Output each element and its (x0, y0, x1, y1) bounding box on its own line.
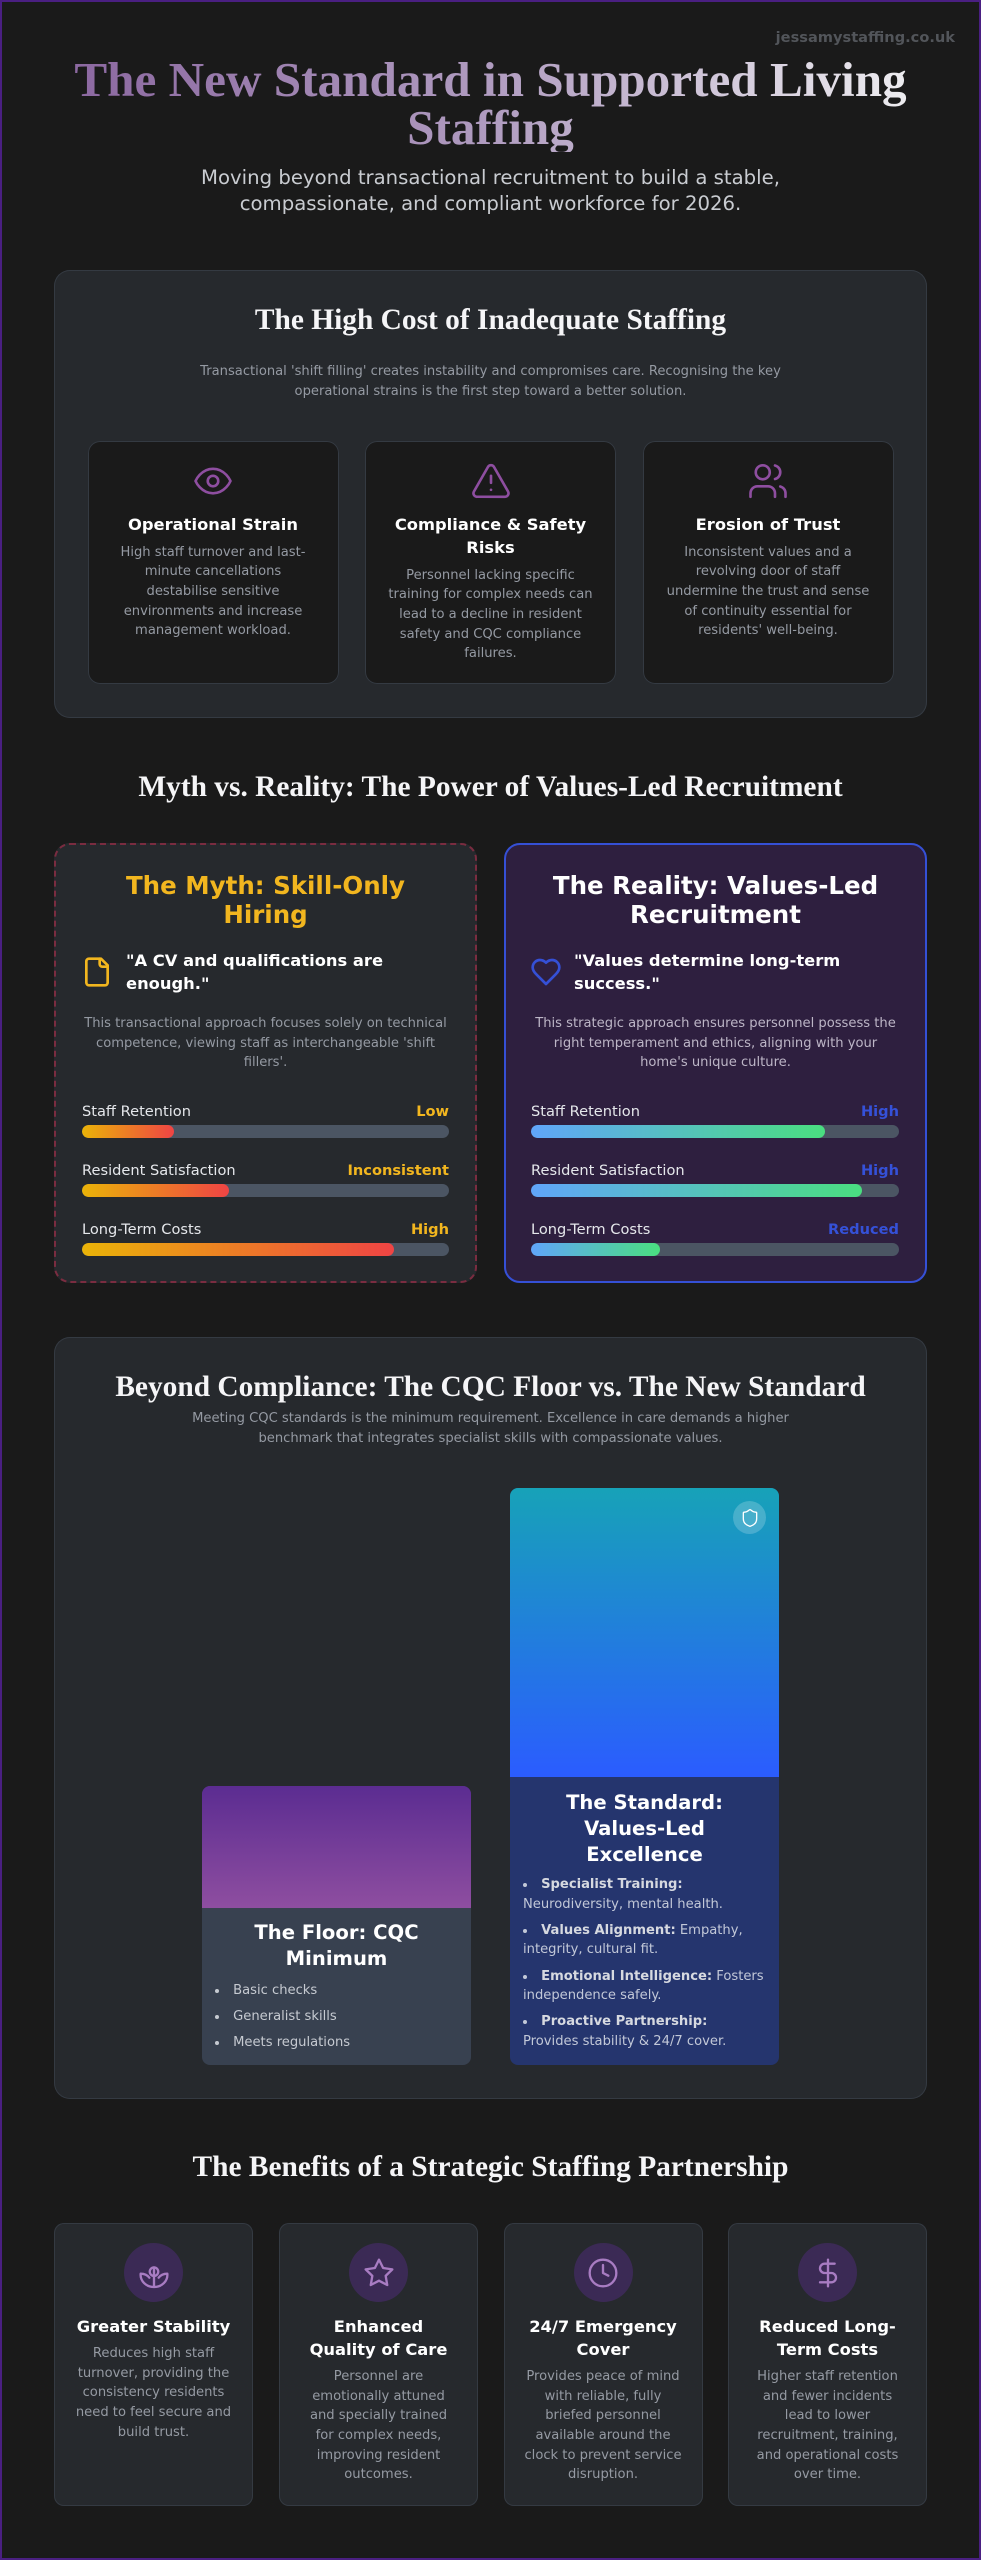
benefit title: Enhanced (334, 2317, 423, 2336)
icon badge: dollar (798, 2243, 857, 2302)
icon badge: clock (574, 2243, 632, 2302)
heading: benefits: The Benefits of a Strategic Staffing Partnership (193, 2151, 788, 2183)
floor list: Basic checks (233, 1983, 317, 1998)
benefit text: clock to prevent service (524, 2448, 682, 2463)
myth heading: Hiring (223, 900, 308, 929)
bar: staff retention: Staff Retention (82, 1102, 191, 1120)
benefit text: build trust. (118, 2425, 189, 2440)
benefit title (759, 2317, 896, 2359)
benefit text (310, 2369, 447, 2482)
website label: jessamystaffing.co.uk (776, 29, 955, 46)
myth text: fillers'. (244, 1055, 287, 1070)
bar: resident satisfaction: Resident Satisfaction (531, 1162, 685, 1178)
subtitle: compassionate, and compliant workforce for 2026. (240, 192, 741, 215)
bar: long-term costs: High (411, 1220, 449, 1238)
panel: high cost of inadequate staffing (54, 270, 927, 718)
reality heading: Recruitment (630, 900, 801, 929)
badge: shield (733, 1501, 766, 1534)
card text: safety and CQC compliance (400, 627, 581, 642)
card: operational strain (88, 441, 338, 684)
text: high cost intro (200, 364, 781, 399)
icon badge: star (349, 2243, 408, 2302)
standard list: Emotional Intelligence: Fosters (541, 1969, 764, 1984)
column: the floor (202, 1786, 471, 2065)
benefit text (76, 2346, 231, 2440)
bar: staff retention: Low (416, 1102, 449, 1120)
title: Staffing (407, 100, 574, 155)
standard list: Values Alignment: Empathy, (541, 1923, 743, 1938)
icon: eye (194, 468, 232, 495)
bar: long-term costs (531, 1220, 899, 1256)
bar: resident satisfaction (531, 1162, 899, 1197)
myth text: This transactional approach focuses solely on technical (84, 1016, 447, 1031)
benefit text: need to feel secure and (76, 2405, 231, 2420)
standard title: Excellence (586, 1843, 703, 1866)
text: high cost intro: operational strains is the first step toward a better solution. (295, 384, 686, 399)
standard list: Proactive Partnership: (541, 2014, 707, 2029)
card: reduced long-term costs (728, 2223, 927, 2506)
benefit title: 24/7 Emergency (529, 2317, 677, 2336)
card: compliance and safety risks (365, 441, 616, 684)
standard list: integrity, cultural fit. (523, 1942, 658, 1957)
benefit text: with reliable, fully (545, 2389, 661, 2404)
bar: long-term costs: Long-Term Costs (531, 1220, 650, 1238)
panel: beyond compliance (54, 1337, 927, 2099)
card text: training for complex needs can (388, 587, 593, 602)
bar: resident satisfaction: High (861, 1162, 899, 1178)
card text: Inconsistent values and a (684, 544, 852, 560)
card title: Risks (466, 538, 515, 557)
benefit text: outcomes. (344, 2467, 413, 2482)
bar: resident satisfaction: Inconsistent (347, 1162, 449, 1178)
benefit title: Greater Stability (77, 2317, 230, 2336)
card title (395, 515, 586, 557)
subtitle (201, 166, 780, 215)
benefit text: lead to lower (785, 2408, 870, 2423)
card title: Compliance & Safety (395, 515, 586, 534)
myth quote (126, 951, 383, 993)
reality heading: The Reality: Values-Led (553, 871, 878, 900)
benefit text: briefed personnel (545, 2408, 661, 2423)
bar: long-term costs (82, 1220, 449, 1256)
heading: high cost: The High Cost of Inadequate Staffing (255, 304, 726, 336)
card text: minute cancellations (145, 564, 281, 579)
benefit text: for complex needs, (316, 2428, 441, 2443)
benefit text (524, 2369, 682, 2482)
bar: staff retention: Staff Retention (531, 1102, 640, 1120)
myth text: competence, viewing staff as interchangeable 'shift (96, 1036, 435, 1051)
icon: users (749, 464, 787, 498)
card text: residents' well-being. (698, 623, 838, 638)
myth heading (126, 871, 405, 929)
floor gradient block (202, 1786, 471, 1908)
bar: long-term costs: Reduced (828, 1220, 899, 1238)
benefit text: Reduces high staff (93, 2346, 214, 2361)
card text: undermine the trust and sense (667, 584, 869, 599)
icon badge: flower (124, 2243, 183, 2302)
card text: High staff turnover and last- (120, 544, 306, 560)
benefit text: over time. (794, 2467, 861, 2482)
card text: lead to a decline in resident (399, 607, 582, 622)
title: The New Standard in Supported Living (74, 52, 907, 107)
card text: destabilise sensitive (146, 584, 279, 599)
card text: management workload. (135, 623, 291, 638)
card text: of continuity essential for (684, 604, 852, 619)
text: beyond compliance intro: Meeting CQC standards is the minimum requirement. Excellence in care demands a higher (192, 1411, 789, 1426)
benefit title (310, 2317, 447, 2359)
benefit text: and specially trained (310, 2408, 447, 2423)
bar: resident satisfaction (82, 1162, 449, 1197)
reality quote: "Values determine long-term (574, 951, 840, 970)
floor title (254, 1921, 419, 1970)
reality text (535, 1016, 896, 1070)
card text (667, 544, 869, 638)
benefit title: Quality of Care (310, 2340, 447, 2359)
myth quote: enough." (126, 974, 209, 993)
panel: the reality (504, 843, 927, 1283)
icon: warning triangle (472, 464, 510, 498)
card: enhanced quality of care (279, 2223, 478, 2506)
benefit text: consistency residents (83, 2385, 224, 2400)
card title: Erosion of Trust (696, 515, 840, 534)
card text: failures. (464, 646, 517, 661)
text: beyond compliance intro: benchmark that integrates specialist skills with compassionate values. (258, 1431, 723, 1446)
standard list: Neurodiversity, mental health. (523, 1897, 723, 1912)
text: high cost intro: Transactional 'shift filling' creates instability and compromises care. Recognising the key (200, 364, 781, 379)
benefit text: disruption. (568, 2467, 638, 2482)
myth heading: The Myth: Skill-Only (126, 871, 405, 900)
column: the standard (510, 1488, 779, 2065)
card text (120, 544, 306, 638)
standard title: The Standard: (566, 1791, 723, 1814)
floor list (215, 1983, 350, 2050)
benefit title (529, 2317, 677, 2359)
standard list: Specialist Training: (541, 1877, 683, 1892)
benefit text: improving resident (317, 2448, 440, 2463)
bar: resident satisfaction: Resident Satisfaction (82, 1162, 236, 1178)
standard gradient block (510, 1488, 779, 1777)
reality heading (553, 871, 878, 929)
card text: Personnel lacking specific (406, 568, 575, 582)
card title: Operational Strain (128, 515, 298, 534)
text: beyond compliance intro (192, 1411, 789, 1446)
icon: document (85, 957, 109, 987)
standard title: Values-Led (584, 1817, 705, 1840)
reality text: home's unique culture. (640, 1055, 791, 1070)
standard list: independence safely. (523, 1988, 661, 2003)
benefit text: available around the (535, 2428, 671, 2443)
benefit text: recruitment, training, (757, 2428, 898, 2443)
standard list (523, 1877, 764, 2049)
card text (388, 568, 593, 661)
myth text (84, 1016, 447, 1070)
benefit title: Cover (577, 2340, 629, 2359)
benefit title: Term Costs (777, 2340, 878, 2359)
heading: myth vs reality: Myth vs. Reality: The Power of Values-Led Recruitment (138, 771, 843, 803)
benefit text: emotionally attuned (312, 2389, 445, 2404)
floor title: The Floor: CQC (254, 1921, 419, 1944)
myth quote: "A CV and qualifications are (126, 951, 383, 970)
bar: staff retention (531, 1102, 899, 1138)
bar: staff retention: High (861, 1102, 899, 1120)
subtitle: Moving beyond transactional recruitment to build a stable, (201, 166, 780, 189)
benefit text: Personnel are (334, 2369, 423, 2384)
reality quote (574, 951, 840, 993)
heading: beyond compliance: Beyond Compliance: The CQC Floor vs. The New Standard (115, 1371, 866, 1403)
panel: the myth (54, 843, 477, 1283)
icon: heart (531, 958, 561, 986)
icon: shield (742, 1509, 758, 1527)
benefit text: Provides peace of mind (526, 2369, 680, 2384)
reality text: This strategic approach ensures personnel possess the (535, 1016, 896, 1031)
benefit text: and fewer incidents (763, 2389, 892, 2404)
benefit text: Higher staff retention (757, 2369, 898, 2384)
floor title: Minimum (286, 1947, 387, 1970)
bar: staff retention (82, 1102, 449, 1138)
floor list: Meets regulations (233, 2035, 350, 2050)
reality text: right temperament and ethics, aligning with your (554, 1036, 877, 1051)
title (54, 56, 927, 152)
card: erosion of trust (642, 441, 894, 684)
benefit text: turnover, providing the (78, 2366, 229, 2381)
bar: long-term costs: Long-Term Costs (82, 1220, 201, 1238)
card text: environments and increase (124, 604, 302, 619)
reality quote: success." (574, 974, 660, 993)
benefit text (757, 2369, 898, 2482)
standard list: Provides stability & 24/7 cover. (523, 2034, 726, 2049)
standard title (566, 1791, 723, 1866)
benefit text: and operational costs (757, 2448, 898, 2463)
card: emergency cover (504, 2223, 702, 2506)
card: greater stability (54, 2223, 253, 2506)
benefit title: Reduced Long- (759, 2317, 896, 2336)
floor list: Generalist skills (233, 2009, 337, 2024)
card text: revolving door of staff (696, 564, 840, 579)
